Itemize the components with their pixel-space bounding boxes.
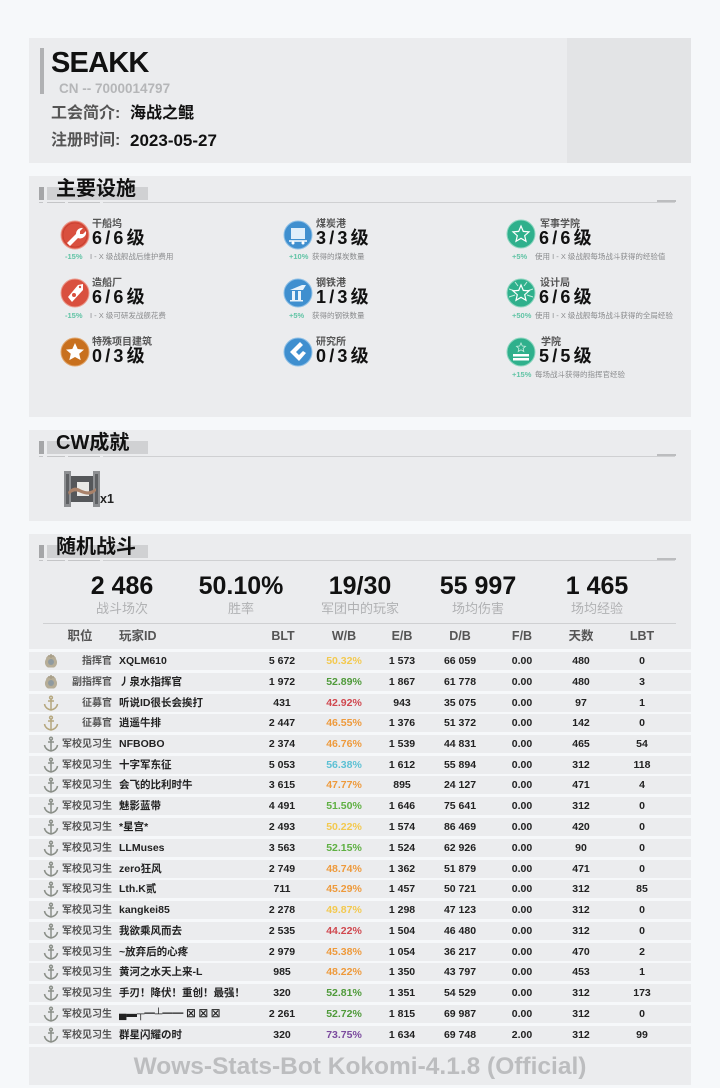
- row: 我欲乘风而去: 312: [572, 925, 590, 937]
- row: 逍遥牛排: 0.00: [512, 717, 532, 729]
- row: 逍遥牛排: 逍遥牛排: [119, 717, 161, 729]
- row: XQLM610: 0: [639, 655, 645, 667]
- row: 魅影蓝带: 0.00: [512, 800, 532, 812]
- clan description: 海战之鲲: [130, 105, 194, 122]
- row: 泉水指挥官: [29, 673, 691, 691]
- row: NFBOBO: 465: [572, 738, 590, 750]
- row: zero狂风: [29, 860, 691, 878]
- row: 黄河之水天上来-L: 黄河之水天上来-L: [119, 966, 202, 978]
- row: 群星闪耀の时: 99: [636, 1029, 648, 1041]
- row: 黄河之水天上来-L: 453: [572, 966, 590, 978]
- row: ~放弃后的心疼: 45.38%: [326, 946, 362, 958]
- row: 会飞的比利时牛: 47.77%: [326, 779, 362, 791]
- row: 十字军东征: 312: [572, 759, 590, 771]
- row: kangkei85: 0.00: [512, 904, 532, 916]
- row: 我欲乘风而去: [29, 922, 691, 940]
- row: NFBOBO: NFBOBO: [119, 738, 164, 750]
- row: ~放弃后的心疼: 1 054: [389, 946, 415, 958]
- row: ~放弃后的心疼: 470: [572, 946, 590, 958]
- row: LLMuses: 军校见习生: [62, 843, 112, 854]
- row: 群星闪耀の时: 73.75%: [326, 1029, 362, 1041]
- row: 手刃降伏重创最强: 312: [572, 987, 590, 999]
- stat: win rate: [199, 572, 283, 616]
- row: 手刃降伏重创最强: 1 351: [389, 987, 415, 999]
- name: 干船坞: [92, 219, 122, 230]
- row: 泉水指挥官: 61 778: [444, 676, 476, 688]
- table header: F/B: [512, 629, 532, 643]
- row: zero狂风: 军校见习生: [62, 864, 112, 875]
- row: XQLM610: 0.00: [512, 655, 532, 667]
- stat: average damage: 场均伤害: [452, 601, 504, 616]
- row: 群星闪耀の时: 军校见习生: [62, 1030, 112, 1041]
- clan description: [51, 104, 194, 122]
- row: *星宫*: 2 493: [269, 821, 295, 833]
- bonus percent: -15%: [65, 252, 83, 261]
- row: 魅影蓝带: 魅影蓝带: [119, 800, 161, 812]
- row: zero狂风: zero狂风: [119, 863, 162, 875]
- row: 会飞的比利时牛: 0.00: [512, 779, 532, 791]
- level: 6 / 6 级: [92, 287, 145, 307]
- row: NFBOBO: 44 831: [444, 738, 476, 750]
- row: *星宫*: *星宫*: [119, 821, 148, 833]
- row: 手刃降伏重创最强: 52.81%: [326, 987, 362, 999]
- table header: [67, 629, 654, 643]
- table header: 天数: [568, 629, 594, 643]
- row: ~放弃后的心疼: ~放弃后的心疼: [119, 946, 188, 958]
- level: 0 / 3 级: [316, 346, 369, 366]
- stat: average damage: [440, 572, 516, 616]
- icon: CW badge: [64, 471, 100, 507]
- name: 学院: [541, 337, 561, 348]
- row: 听说ID很长会挨打: 听说ID很长会挨打: [119, 697, 203, 709]
- stat: battles: [91, 572, 153, 616]
- row: 群星闪耀の时: 69 748: [444, 1029, 476, 1041]
- icon: star teal: [506, 220, 536, 248]
- row: kangkei85: 0: [639, 904, 645, 916]
- bonus percent: +5%: [512, 252, 527, 261]
- facility: academy: [506, 336, 625, 379]
- level: 3 / 3 级: [316, 228, 369, 248]
- row: 泉水指挥官: 1 867: [389, 676, 415, 688]
- row: 十字军东征: 55 894: [444, 759, 476, 771]
- row: 十字军东征: 0.00: [512, 759, 532, 771]
- stat: battles: 2 486: [91, 572, 153, 600]
- facility: dry dock: [60, 218, 173, 261]
- row: NFBOBO: [29, 735, 691, 753]
- row: 泉水指挥官: 1 972: [269, 676, 295, 688]
- heading: main facilities: [39, 178, 676, 203]
- row: 黄河之水天上来-L: 0.00: [512, 966, 532, 978]
- row: 十字军东征: 军校见习生: [62, 760, 112, 771]
- row: 我欲乘风而去: 2 535: [269, 925, 295, 937]
- row: 手刃降伏重创最强: 0.00: [512, 987, 532, 999]
- icon: star and bars: [506, 338, 536, 366]
- stat: players in clan: 军团中的玩家: [321, 601, 399, 616]
- bonus percent: -15%: [65, 311, 83, 320]
- row: XQLM610: 480: [572, 655, 590, 667]
- row: 逍遥牛排: [29, 714, 691, 732]
- row: symbol name: [29, 1005, 691, 1023]
- bonus description: 每场战斗获得的指挥官经验: [535, 370, 625, 379]
- row: LLMuses: 3 563: [269, 842, 295, 854]
- row: 逍遥牛排: 51 372: [444, 717, 476, 729]
- row: Lth.K贰: 85: [636, 883, 648, 895]
- row: kangkei85: [29, 901, 691, 919]
- row: XQLM610: 指挥官: [82, 656, 112, 667]
- level: 1 / 3 级: [316, 287, 369, 307]
- row: ~放弃后的心疼: 2 979: [269, 946, 295, 958]
- row: 听说ID很长会挨打: 0.00: [512, 697, 532, 709]
- row: *星宫*: 86 469: [444, 821, 476, 833]
- bonus description: 获得的煤炭数量: [312, 252, 364, 261]
- row: LLMuses: 0.00: [512, 842, 532, 854]
- row: LLMuses: 62 926: [444, 842, 476, 854]
- row: 黄河之水天上来-L: [29, 963, 691, 981]
- heading: main facilities: 主要设施: [56, 178, 136, 200]
- name: 造船厂: [92, 278, 122, 289]
- row: 会飞的比利时牛: 会飞的比利时牛: [119, 779, 192, 791]
- clan name: SEAKK: [51, 47, 149, 79]
- name: 钢铁港: [316, 278, 346, 289]
- row: XQLM610: 50.32%: [326, 655, 362, 667]
- bonus description: 获得的钢铁数量: [312, 311, 364, 320]
- row: 群星闪耀の时: 群星闪耀の时: [119, 1029, 182, 1041]
- panel: CW achievements: [29, 430, 691, 521]
- row: 魅影蓝带: 军校见习生: [62, 801, 112, 812]
- stat: win rate: 50.10%: [199, 572, 283, 600]
- row: 魅影蓝带: [29, 797, 691, 815]
- stat: players in clan: 19/30: [329, 572, 391, 600]
- clan id: CN -- 7000014797: [59, 81, 170, 96]
- registration date: 2023-05-27: [130, 131, 217, 150]
- row: XQLM610: 1 573: [389, 655, 415, 667]
- row: kangkei85: 军校见习生: [62, 905, 112, 916]
- row: 我欲乘风而去: 0: [639, 925, 645, 937]
- divider line: [43, 623, 676, 624]
- row: *星宫*: 0.00: [512, 821, 532, 833]
- row: 群星闪耀の时: 320: [273, 1029, 291, 1041]
- row: zero狂风: 48.74%: [326, 863, 362, 875]
- row: NFBOBO: 0.00: [512, 738, 532, 750]
- row: 我欲乘风而去: 军校见习生: [62, 926, 112, 937]
- bonus description: 使用 I - X 级战舰每场战斗获得的全局经验: [535, 311, 673, 320]
- stat: average experience: 1 465: [566, 572, 628, 600]
- row: Lth.K贰: 312: [572, 883, 590, 895]
- row: 会飞的比利时牛: [29, 776, 691, 794]
- icon: star burst: [506, 278, 536, 308]
- row: ~放弃后的心疼: 2: [639, 946, 645, 958]
- achievement count: x1: [100, 492, 114, 506]
- row: 会飞的比利时牛: 军校见习生: [62, 780, 112, 791]
- row: symbol name: 2 261: [269, 1008, 295, 1020]
- row: 手刃降伏重创最强: 54 529: [444, 987, 476, 999]
- icon: coal cart: [284, 220, 312, 250]
- row: symbol name: 军校见习生: [62, 1009, 112, 1020]
- row: LLMuses: 1 524: [389, 842, 415, 854]
- registration date: [51, 131, 217, 150]
- row: LLMuses: [29, 839, 691, 857]
- row: 魅影蓝带: 4 491: [269, 800, 295, 812]
- stat: players in clan: [321, 572, 399, 616]
- row: 十字军东征: 1 612: [389, 759, 415, 771]
- row: NFBOBO: 1 539: [389, 738, 415, 750]
- footer band: [29, 1047, 691, 1085]
- row: *星宫*: [29, 818, 691, 836]
- table header: 职位: [67, 629, 93, 643]
- table header: 玩家ID: [119, 629, 157, 643]
- icon: diamond: [284, 338, 312, 366]
- row: zero狂风: 0: [639, 863, 645, 875]
- row: 黄河之水天上来-L: 军校见习生: [62, 967, 112, 978]
- row: 十字军东征: 5 053: [269, 759, 295, 771]
- row: kangkei85: 49.87%: [326, 904, 362, 916]
- row: zero狂风: 0.00: [512, 863, 532, 875]
- row: LLMuses: LLMuses: [119, 842, 165, 854]
- bonus percent: +5%: [289, 311, 304, 320]
- row: 十字军东征: 56.38%: [326, 759, 362, 771]
- row: 我欲乘风而去: 46 480: [444, 925, 476, 937]
- level: 6 / 6 级: [92, 228, 145, 248]
- facility: steel port: [284, 277, 369, 320]
- bonus description: I - X 级战舰战后维护费用: [90, 252, 173, 261]
- name: 研究所: [316, 337, 346, 348]
- row: 手刃降伏重创最强: 320: [273, 987, 291, 999]
- row: 逍遥牛排: 0: [639, 717, 645, 729]
- row: kangkei85: 2 278: [269, 904, 295, 916]
- row: 我欲乘风而去: 0.00: [512, 925, 532, 937]
- bonus percent: +50%: [512, 311, 531, 320]
- row: 会飞的比利时牛: 3 615: [269, 779, 295, 791]
- bonus percent: +15%: [512, 370, 531, 379]
- heading: random battles: 随机战斗: [56, 536, 136, 558]
- row: 泉水指挥官: 副指挥官: [72, 677, 112, 688]
- row: 我欲乘风而去: 我欲乘风而去: [119, 925, 182, 937]
- row: 魅影蓝带: 312: [572, 800, 590, 812]
- row: *星宫*: 军校见习生: [62, 822, 112, 833]
- icon: star orange: [60, 338, 90, 366]
- row: symbol name: 0.00: [512, 1008, 532, 1020]
- row: Lth.K贰: 1 457: [389, 883, 415, 895]
- icon: discount tag: [60, 278, 90, 308]
- row: kangkei85: 47 123: [444, 904, 476, 916]
- row: *星宫*: 0: [639, 821, 645, 833]
- table header: BLT: [271, 629, 295, 643]
- table header: W/B: [332, 629, 356, 643]
- row: 十字军东征: 118: [634, 759, 650, 771]
- row: 十字军东征: 十字军东征: [119, 759, 172, 771]
- row: 逍遥牛排: 征募官: [82, 718, 112, 729]
- row: NFBOBO: 54: [636, 738, 648, 750]
- row: ~放弃后的心疼: 36 217: [444, 946, 476, 958]
- row: 手刃降伏重创最强: [29, 984, 691, 1002]
- row: symbol name: 312: [572, 1008, 590, 1020]
- row: ~放弃后的心疼: 军校见习生: [62, 947, 112, 958]
- row: NFBOBO: 46.76%: [326, 738, 362, 750]
- row: Lth.K贰: 711: [274, 883, 290, 895]
- row: symbol name: 1 815: [389, 1008, 415, 1020]
- row: Lth.K贰: [29, 880, 691, 898]
- row: 听说ID很长会挨打: 1: [639, 697, 645, 709]
- row: 听说ID很长会挨打: [29, 694, 691, 712]
- row: 黄河之水天上来-L: 985: [273, 966, 291, 978]
- row: 黄河之水天上来-L: 43 797: [444, 966, 476, 978]
- row: symbol name: 52.72%: [326, 1008, 362, 1020]
- level: 5 / 5 级: [539, 346, 592, 366]
- bonus description: I - X 级可研发战舰花费: [90, 311, 166, 320]
- row: 泉水指挥官: 480: [572, 676, 590, 688]
- row: 黄河之水天上来-L: 1 350: [389, 966, 415, 978]
- header accent bar: [40, 48, 44, 94]
- row: NFBOBO: 军校见习生: [62, 739, 112, 750]
- heading: CW achievements: CW成就: [56, 432, 129, 454]
- row: zero狂风: 2 749: [269, 863, 295, 875]
- row: Lth.K贰: Lth.K贰: [119, 883, 156, 895]
- panel: main facilities: [29, 176, 691, 417]
- name: 煤炭港: [316, 219, 346, 230]
- stat: average damage: 55 997: [440, 572, 516, 600]
- registration date: 注册时间:: [51, 132, 120, 149]
- row: ~放弃后的心疼: 0.00: [512, 946, 532, 958]
- row: Lth.K贰: 50 721: [444, 883, 476, 895]
- row: 听说ID很长会挨打: 943: [393, 697, 411, 709]
- bonus description: 使用 I - X 级战舰每场战斗获得的经验值: [535, 252, 665, 261]
- row: 听说ID很长会挨打: 97: [575, 697, 587, 709]
- facility: military academy: [506, 218, 666, 261]
- row: 群星闪耀の时: 312: [572, 1029, 590, 1041]
- row: 魅影蓝带: 75 641: [444, 800, 476, 812]
- name: 特殊项目建筑: [92, 337, 152, 348]
- table header: D/B: [449, 629, 471, 643]
- header right block: [567, 38, 691, 163]
- row: 黄河之水天上来-L: 48.22%: [326, 966, 362, 978]
- row: *星宫*: 1 574: [389, 821, 415, 833]
- row: Lth.K贰: 0.00: [512, 883, 532, 895]
- level: 6 / 6 级: [539, 287, 592, 307]
- row: 我欲乘风而去: 1 504: [389, 925, 415, 937]
- stat: battles: 战斗场次: [96, 601, 148, 616]
- row: symbol name: 69 987: [444, 1008, 476, 1020]
- panel: random battles summary: [29, 534, 691, 649]
- row: 魅影蓝带: 0: [639, 800, 645, 812]
- row: kangkei85: 312: [572, 904, 590, 916]
- facility: research institute: [284, 336, 369, 366]
- row: 会飞的比利时牛: 471: [572, 779, 590, 791]
- row: 听说ID很长会挨打: 42.92%: [326, 697, 362, 709]
- row: 听说ID很长会挨打: 征募官: [82, 698, 112, 709]
- row: 魅影蓝带: 51.50%: [326, 800, 362, 812]
- row: 群星闪耀の时: 1 634: [389, 1029, 415, 1041]
- bonus percent: +10%: [289, 252, 308, 261]
- row: ~放弃后的心疼: [29, 943, 691, 961]
- stat: average experience: 场均经验: [571, 601, 623, 616]
- row: 手刃降伏重创最强: 手刃！降伏！重创！最强！: [119, 987, 245, 999]
- row: symbol name: 0: [639, 1008, 645, 1020]
- row: 会飞的比利时牛: 24 127: [444, 779, 476, 791]
- row: 逍遥牛排: 46.55%: [326, 717, 362, 729]
- icon: crane: [284, 278, 312, 308]
- row: *星宫*: 420: [572, 821, 590, 833]
- row: 群星闪耀の时: 2.00: [512, 1029, 532, 1041]
- level: 6 / 6 级: [539, 228, 592, 248]
- row: 十字军东征: [29, 756, 691, 774]
- row: zero狂风: 51 879: [444, 863, 476, 875]
- table header: E/B: [392, 629, 412, 643]
- row: zero狂风: 471: [572, 863, 590, 875]
- row: LLMuses: 0: [639, 842, 645, 854]
- heading: CW achievements: [39, 432, 676, 457]
- facility: shipyard: [60, 277, 166, 320]
- row: 会飞的比利时牛: 4: [639, 779, 645, 791]
- row: 手刃降伏重创最强: 173: [633, 987, 651, 999]
- row: 黄河之水天上来-L: 1: [639, 966, 645, 978]
- row: 我欲乘风而去: 44.22%: [326, 925, 362, 937]
- row: Lth.K贰: 军校见习生: [62, 884, 112, 895]
- row: NFBOBO: 2 374: [269, 738, 295, 750]
- row: 听说ID很长会挨打: 431: [273, 697, 291, 709]
- row: XQLM610: 5 672: [269, 655, 295, 667]
- row: 逍遥牛排: 1 376: [389, 717, 415, 729]
- row: XQLM610: XQLM610: [119, 655, 167, 667]
- row: *星宫*: 50.22%: [326, 821, 362, 833]
- clan description: 工会简介:: [51, 105, 120, 122]
- stat: average experience: [566, 572, 628, 616]
- table header: LBT: [630, 629, 654, 643]
- stat: win rate: 胜率: [228, 601, 254, 616]
- row: symbol name: ▄▬┬━┴━━ ☒ ☒ ☒: [119, 1008, 220, 1020]
- name: 设计局: [540, 278, 570, 289]
- facility: special project: [60, 336, 152, 366]
- row: 逍遥牛排: 2 447: [269, 717, 295, 729]
- row: 泉水指挥官: 丿泉水指挥官: [119, 676, 182, 688]
- footer text: Wows-Stats-Bot Kokomi-4.1.8 (Official): [134, 1053, 586, 1080]
- facility: coal port: [284, 218, 369, 261]
- row: LLMuses: 90: [575, 842, 587, 854]
- icon: wrench: [60, 220, 90, 250]
- row: 手刃降伏重创最强: 军校见习生: [62, 988, 112, 999]
- row: XQLM610: [29, 652, 691, 670]
- row: XQLM610: 66 059: [444, 655, 476, 667]
- row: Lth.K贰: 45.29%: [326, 883, 362, 895]
- row: kangkei85: kangkei85: [119, 904, 170, 916]
- row: 逍遥牛排: 142: [572, 717, 590, 729]
- heading: random battles: [39, 536, 676, 561]
- row: 听说ID很长会挨打: 35 075: [444, 697, 476, 709]
- row: 泉水指挥官: 3: [639, 676, 645, 688]
- row: LLMuses: 52.15%: [326, 842, 362, 854]
- row: kangkei85: 1 298: [389, 904, 415, 916]
- row: 泉水指挥官: 52.89%: [326, 676, 362, 688]
- facility: design bureau: [506, 277, 673, 320]
- row: 群星闪耀の时: [29, 1026, 691, 1044]
- row: 会飞的比利时牛: 895: [393, 779, 411, 791]
- name: 军事学院: [540, 219, 580, 230]
- row: 泉水指挥官: 0.00: [512, 676, 532, 688]
- row: 魅影蓝带: 1 646: [389, 800, 415, 812]
- panel: clan header: [29, 38, 691, 163]
- level: 0 / 3 级: [92, 346, 145, 366]
- row: zero狂风: 1 362: [389, 863, 415, 875]
